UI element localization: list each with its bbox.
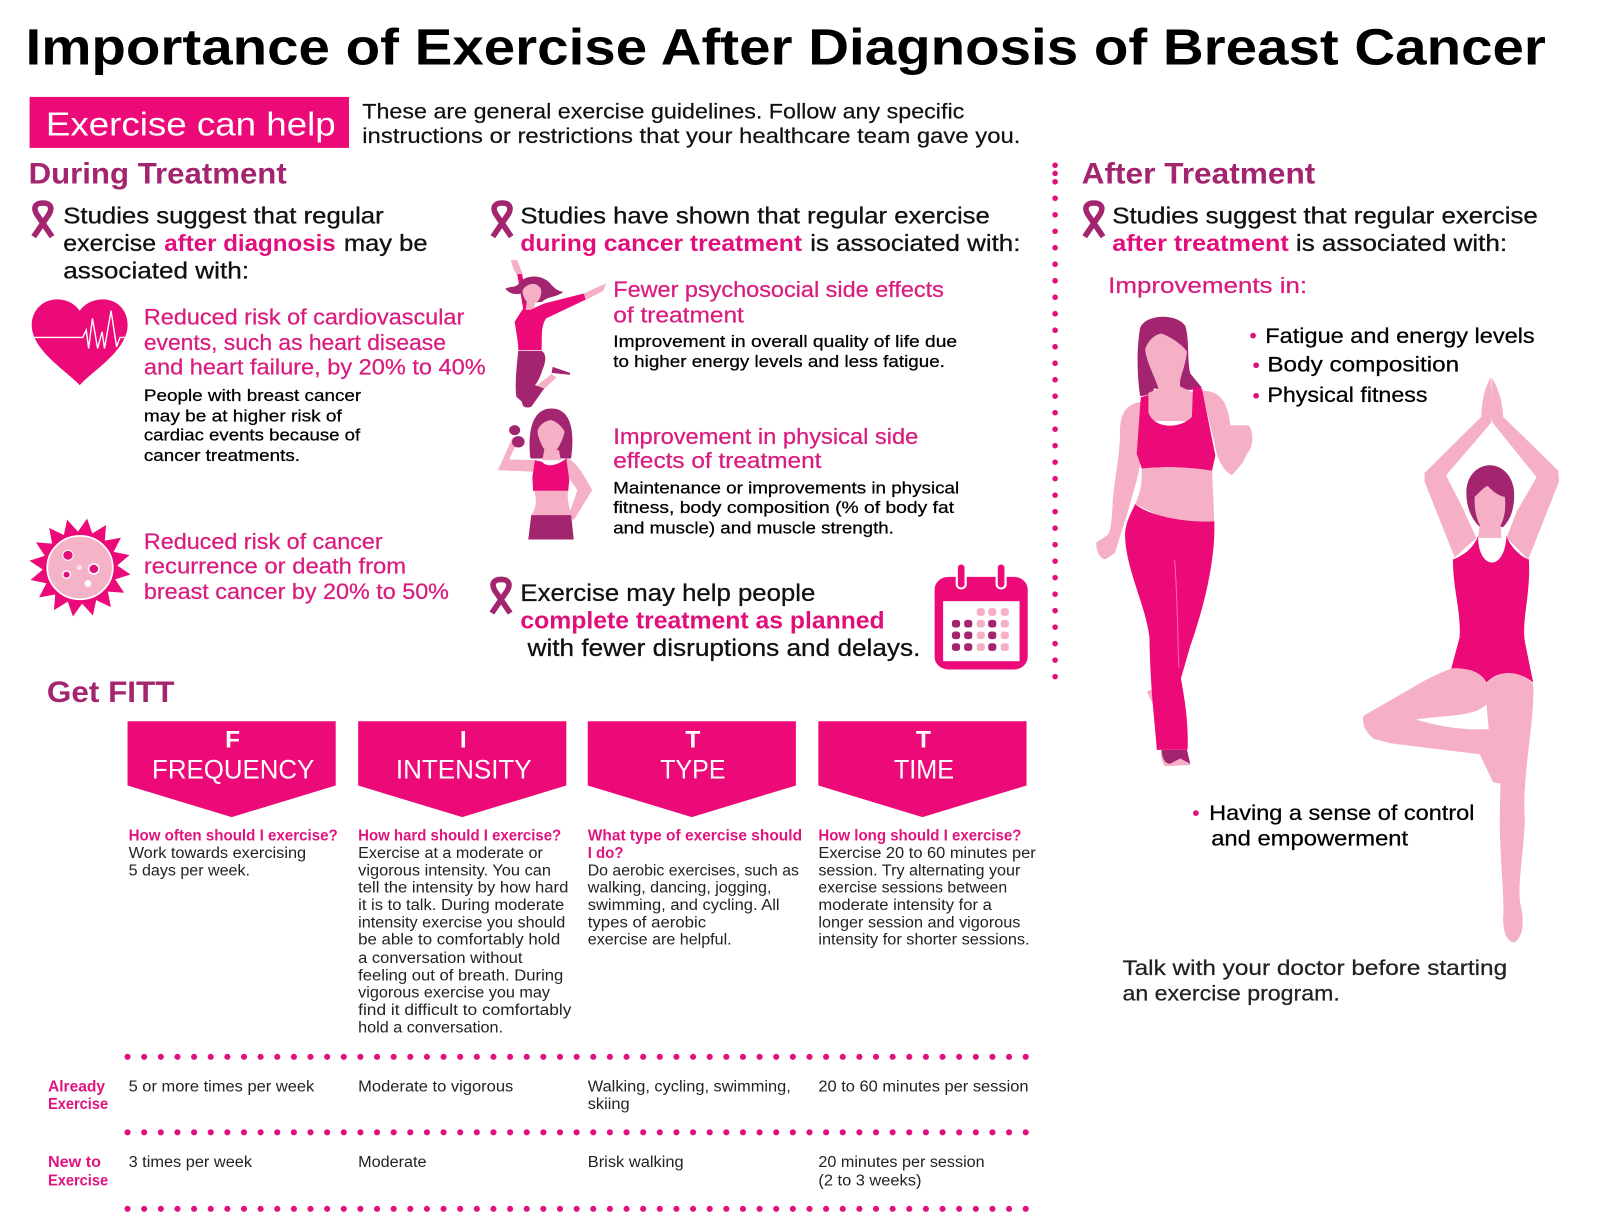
row: already exercise: Already bbox=[48, 1079, 106, 1096]
icon: ribbon bbox=[34, 203, 52, 237]
column text: frequency bbox=[129, 828, 338, 879]
column text: intensity: How hard should I exercise? bbox=[358, 828, 561, 845]
intro text bbox=[362, 99, 1020, 148]
text: cardiovascular benefit: events, such as heart disease bbox=[144, 330, 446, 355]
row: new to exercise: Moderate bbox=[358, 1154, 427, 1171]
column text: frequency: How often should I exercise? bbox=[129, 828, 338, 845]
column text: intensity: feeling out of breath. During bbox=[358, 967, 563, 984]
text: complete treatment as planned bbox=[520, 580, 920, 662]
column text: type: swimming, and cycling. All bbox=[588, 897, 780, 914]
column text: time bbox=[818, 828, 1036, 949]
text: studies after treatment: Studies suggest that regular exercise bbox=[1112, 202, 1538, 228]
column text: time: longer session and vigorous bbox=[818, 914, 1021, 931]
text: cardiovascular benefit: cancer treatments. bbox=[144, 446, 300, 465]
text: cardiovascular benefit bbox=[144, 304, 486, 465]
column text: type: What type of exercise should bbox=[588, 828, 802, 845]
text: physical side effects: and muscle) and muscle strength. bbox=[613, 519, 894, 538]
arrow: frequency: F bbox=[225, 727, 240, 754]
arrow: intensity: INTENSITY bbox=[396, 754, 532, 784]
row: new to exercise bbox=[48, 1154, 985, 1189]
column text: time: moderate intensity for a bbox=[818, 897, 992, 914]
text: physical side effects bbox=[613, 424, 959, 538]
text: psychosocial side effects: Fewer psychosocial side effects bbox=[613, 277, 944, 302]
column text: intensity: Exercise at a moderate or bbox=[358, 845, 543, 862]
row: new to exercise: 3 times per week bbox=[129, 1154, 252, 1171]
row: new to exercise: 20 minutes per session bbox=[818, 1154, 985, 1171]
row: new to exercise: Exercise bbox=[48, 1172, 108, 1189]
column text: type bbox=[587, 828, 802, 949]
bullet: sense of control: Having a sense of control bbox=[1209, 801, 1474, 825]
icon: heart with pulse bbox=[32, 299, 128, 385]
text: physical side effects: fitness, body composition (% of body fat bbox=[613, 498, 954, 517]
bullet list: improvements: Body composition bbox=[1267, 352, 1459, 376]
column text: intensity: intensity exercise you should bbox=[358, 914, 565, 931]
row: already exercise bbox=[48, 1079, 1029, 1113]
column text: time: intensity for shorter sessions. bbox=[818, 932, 1030, 949]
icon: cancer cell burst bbox=[22, 512, 138, 623]
row: new to exercise: Brisk walking bbox=[588, 1154, 684, 1171]
row: already exercise: Walking, cycling, swimming, bbox=[588, 1079, 791, 1096]
text: studies after treatment: is associated with: bbox=[1296, 230, 1507, 256]
text: talk with your doctor bbox=[1122, 956, 1507, 1006]
text: cardiovascular benefit: People with breast cancer bbox=[144, 386, 362, 405]
column text: intensity: vigorous intensity. You can bbox=[358, 862, 551, 879]
column text: type: Do aerobic exercises, such as bbox=[588, 862, 799, 879]
text: studies after diagnosis: exercise bbox=[63, 230, 156, 256]
arrow: type bbox=[588, 721, 796, 817]
text: studies after treatment: after treatment bbox=[1112, 230, 1289, 256]
illustration: walking woman bbox=[1096, 317, 1252, 766]
column text: frequency: Work towards exercising bbox=[129, 845, 306, 862]
row: already exercise: 5 or more times per week bbox=[129, 1079, 315, 1096]
banner: exercise can help bbox=[30, 97, 349, 148]
text: studies after diagnosis: Studies suggest that regular bbox=[63, 202, 384, 228]
row: already exercise: skiing bbox=[588, 1096, 630, 1113]
text: cardiovascular benefit: Reduced risk of cardiovascular bbox=[144, 304, 464, 329]
text: studies during treatment: during cancer treatment bbox=[520, 230, 802, 256]
text: studies after diagnosis bbox=[63, 202, 428, 283]
column text: intensity: hold a conversation. bbox=[358, 1019, 503, 1036]
title: Importance of Exercise After Diagnosis of Breast Cancer bbox=[26, 18, 1546, 75]
text: recurrence benefit bbox=[144, 529, 449, 604]
arrow: type: TYPE bbox=[660, 754, 726, 784]
banner: exercise can help: Exercise can help bbox=[46, 107, 336, 144]
row: already exercise: Moderate to vigorous bbox=[358, 1079, 514, 1096]
icon: ribbon bbox=[493, 203, 511, 237]
column text: intensity: find it difficult to comfortably bbox=[358, 1002, 572, 1019]
text: studies during treatment: Studies have shown that regular exercise bbox=[520, 202, 990, 228]
arrow: intensity: I bbox=[460, 727, 467, 754]
icon: calendar bbox=[935, 564, 1028, 670]
vertical dotted divider bbox=[1052, 165, 1058, 677]
bullet: sense of control: and empowerment bbox=[1211, 827, 1408, 851]
text: recurrence benefit: breast cancer by 20% to 50% bbox=[144, 579, 449, 604]
illustration: woman with dumbbell bbox=[498, 408, 592, 540]
text: talk with your doctor: Talk with your doctor before starting bbox=[1122, 956, 1507, 980]
text: physical side effects: Maintenance or improvements in physical bbox=[613, 479, 959, 498]
dotted rows bbox=[128, 1057, 1030, 1209]
arrow: intensity bbox=[358, 721, 566, 817]
column text: type: types of aerobic bbox=[588, 914, 706, 931]
illustration: jumping woman bbox=[505, 260, 606, 407]
text: cardiovascular benefit: and heart failure, by 20% to 40% bbox=[144, 354, 486, 379]
text: psychosocial side effects: of treatment bbox=[613, 302, 744, 327]
column text: type: I do? bbox=[588, 845, 623, 862]
column text: intensity: be able to comfortably hold bbox=[358, 932, 560, 949]
column text: type: exercise are helpful. bbox=[588, 932, 732, 949]
column text: intensity: tell the intensity by how hard bbox=[358, 880, 568, 897]
column text: intensity: it is to talk. During moderate bbox=[358, 897, 564, 914]
subheading: improvements in: Improvements in: bbox=[1108, 273, 1307, 298]
text: recurrence benefit: recurrence or death from bbox=[144, 553, 406, 578]
row: already exercise: 20 to 60 minutes per session bbox=[818, 1079, 1029, 1096]
bullet: sense of control bbox=[1193, 801, 1474, 851]
arrow: time: TIME bbox=[894, 754, 954, 784]
bullet list: improvements bbox=[1250, 324, 1535, 407]
row: new to exercise: (2 to 3 weeks) bbox=[818, 1172, 921, 1189]
column text: type: walking, dancing, jogging, bbox=[587, 880, 771, 897]
text: studies after treatment bbox=[1112, 202, 1538, 256]
column text: intensity: vigorous exercise you may bbox=[358, 985, 550, 1002]
row: new to exercise: New to bbox=[48, 1154, 101, 1171]
column text: intensity bbox=[358, 828, 572, 1036]
text: complete treatment as planned: Exercise may help people bbox=[520, 580, 815, 607]
column text: time: Exercise 20 to 60 minutes per bbox=[818, 845, 1036, 862]
text: studies after diagnosis: after diagnosis bbox=[164, 230, 336, 256]
text: psychosocial side effects bbox=[613, 277, 957, 371]
column text: time: How long should I exercise? bbox=[818, 828, 1021, 845]
illustration: woman in tree yoga pose bbox=[1363, 378, 1559, 942]
text: studies after diagnosis: may be bbox=[344, 230, 428, 256]
text: talk with your doctor: an exercise program. bbox=[1122, 982, 1340, 1006]
icon: ribbon bbox=[1085, 203, 1103, 237]
arrow: frequency: FREQUENCY bbox=[152, 754, 315, 784]
text: psychosocial side effects: to higher energy levels and less fatigue. bbox=[613, 352, 945, 371]
text: studies during treatment: is associated with: bbox=[810, 230, 1020, 256]
text: studies during treatment bbox=[520, 202, 1020, 256]
arrow: time: T bbox=[916, 727, 931, 754]
column text: time: session. Try alternating your bbox=[818, 862, 1020, 879]
heading: get FITT: Get FITT bbox=[47, 676, 174, 709]
column text: time: exercise sessions between bbox=[818, 880, 1007, 897]
bullet list: improvements: Fatigue and energy levels bbox=[1265, 324, 1535, 348]
heading: during treatment: During Treatment bbox=[29, 158, 287, 191]
text: psychosocial side effects: Improvement in overall quality of life due bbox=[613, 332, 957, 351]
text: cardiovascular benefit: may be at higher risk of bbox=[144, 406, 342, 425]
text: complete treatment as planned: complete treatment as planned bbox=[520, 607, 885, 634]
intro text: These are general exercise guidelines. Follow any specific bbox=[362, 99, 965, 123]
column text: intensity: a conversation without bbox=[358, 950, 523, 967]
text: cardiovascular benefit: cardiac events because of bbox=[144, 426, 361, 445]
arrow: frequency bbox=[128, 721, 336, 817]
text: recurrence benefit: Reduced risk of cancer bbox=[144, 529, 383, 554]
text: physical side effects: effects of treatment bbox=[613, 448, 821, 473]
arrow: type: T bbox=[685, 727, 700, 754]
row: already exercise: Exercise bbox=[48, 1096, 108, 1113]
column text: frequency: 5 days per week. bbox=[129, 862, 250, 879]
intro text: instructions or restrictions that your healthcare team gave you. bbox=[362, 124, 1020, 148]
arrow: time bbox=[818, 721, 1027, 817]
text: physical side effects: Improvement in physical side bbox=[613, 424, 918, 449]
text: complete treatment as planned: with fewer disruptions and delays. bbox=[526, 635, 920, 662]
bullet list: improvements: Physical fitness bbox=[1267, 383, 1428, 407]
heading: after treatment: After Treatment bbox=[1082, 158, 1315, 191]
icon: ribbon bbox=[492, 579, 510, 613]
text: studies after diagnosis: associated with: bbox=[63, 257, 249, 283]
